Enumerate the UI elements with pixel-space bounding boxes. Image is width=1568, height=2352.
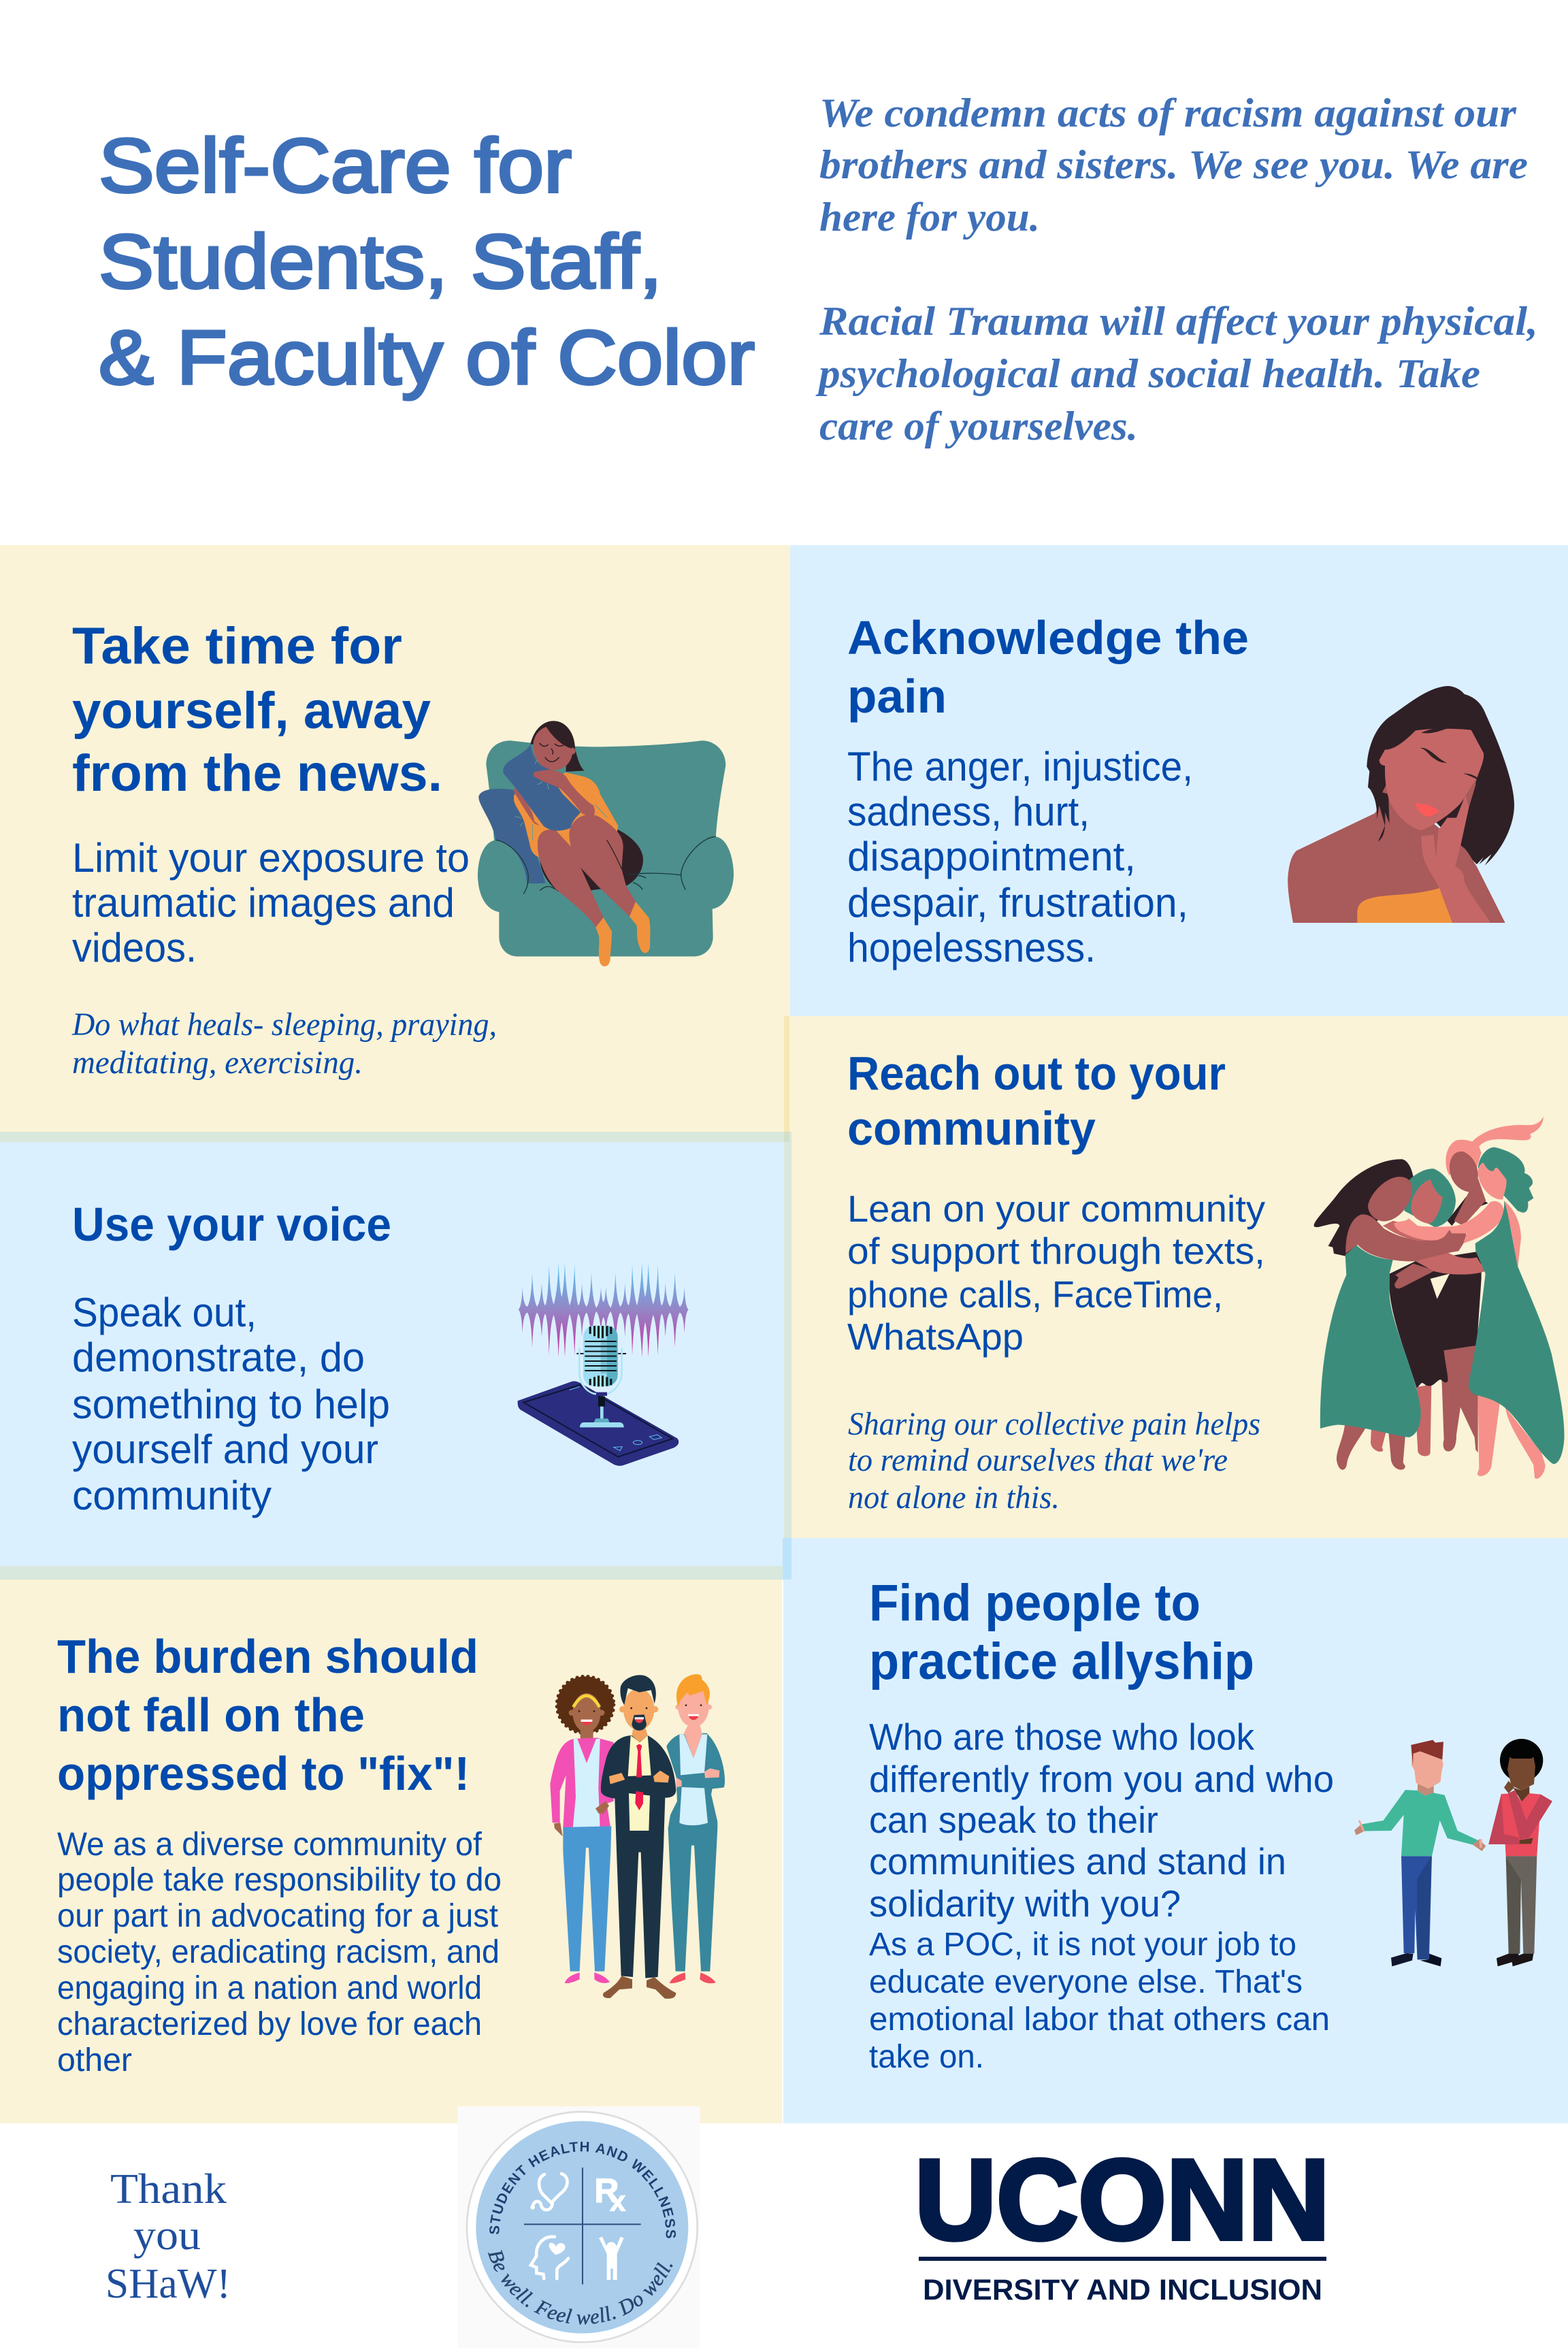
body text: speak out <box>72 1290 390 1518</box>
panel: find people to practice allyship <box>869 1574 1552 2075</box>
intro statement: We condemn acts of racism against our <box>819 91 1517 135</box>
body text: we as a diverse community: our part in advocating for a just <box>57 1898 498 1934</box>
body text: limit exposure <box>72 835 470 970</box>
icon: three diverse colleagues <box>550 1674 725 1999</box>
body text: limit exposure: Limit your exposure to <box>72 835 470 881</box>
body text: the anger: sadness, hurt, <box>847 789 1090 834</box>
heading: acknowledge the pain <box>847 611 1249 723</box>
body text: as a POC: educate everyone else. That's <box>869 1964 1303 2000</box>
heading: find people <box>869 1574 1254 1690</box>
intro statement <box>815 91 1538 448</box>
italic note: sharing our collective pain: to remind ourselves that we're <box>848 1442 1228 1478</box>
intro statement: brothers and sisters. We see you. We are <box>819 142 1528 187</box>
heading: the burden: not fall on the <box>57 1688 365 1742</box>
panel background: take time for yourself <box>0 545 790 1142</box>
title <box>99 123 755 400</box>
body text: as a POC: As a POC, it is not your job to <box>869 1927 1296 1963</box>
body text: we as a diverse community: engaging in a nation and world <box>57 1970 482 2006</box>
heading: take time: Take time for <box>72 617 402 675</box>
heading: reach out <box>847 1047 1226 1155</box>
body text: speak out: Speak out, <box>72 1290 257 1335</box>
body text: the anger: despair, frustration, <box>847 880 1188 926</box>
intro statement: psychological and social health. Take <box>815 351 1480 396</box>
body text: lean on your community: Lean on your community <box>847 1188 1266 1230</box>
intro statement: here for you. <box>819 195 1040 240</box>
body text: as a POC <box>869 1927 1330 2075</box>
body text: speak out: something to help <box>72 1382 390 1427</box>
panel background: the burden should not fall <box>0 1580 783 2123</box>
body text: the anger: The anger, injustice, <box>847 744 1193 789</box>
body text: who are those: can speak to their <box>869 1799 1158 1841</box>
body text: as a POC: take on. <box>869 2039 984 2075</box>
logo: student health and wellness: STUDENT HEALTH AND WELLNESS <box>489 2142 676 2238</box>
body text: limit exposure: traumatic images and <box>72 880 455 926</box>
body text: who are those: solidarity with you? <box>869 1882 1181 1925</box>
heading: reach out: community <box>847 1102 1096 1155</box>
icon: women embracing <box>1314 1116 1565 1479</box>
heading: take time: yourself, away <box>72 682 431 740</box>
body text: speak out: demonstrate, do <box>72 1335 365 1380</box>
heading: reach out: Reach out to your <box>847 1047 1226 1100</box>
icon: woman relaxing on sofa <box>478 721 734 966</box>
panel: use your voice <box>72 1198 689 1518</box>
body text: speak out: yourself and your <box>72 1426 378 1472</box>
icon: woman in pain <box>1288 686 1514 923</box>
logo: student health and wellness: R <box>594 2172 619 2210</box>
body text: the anger <box>847 744 1193 970</box>
thank you note <box>105 2166 231 2307</box>
panel background: use your voice <box>0 1142 784 1566</box>
body text: lean on your community <box>847 1188 1266 1358</box>
intro statement: Racial Trauma will affect your physical, <box>819 299 1538 344</box>
body text: we as a diverse community <box>57 1827 502 2078</box>
italic note: do what heals <box>71 1007 497 1081</box>
heading: find people: Find people to <box>869 1574 1200 1632</box>
heading: the burden: The burden should <box>57 1630 478 1683</box>
body text: we as a diverse community: people take responsibility to do <box>57 1862 502 1898</box>
icon: two allies talking <box>1354 1739 1552 1966</box>
thank you note: SHaW! <box>105 2261 231 2307</box>
body text: lean on your community: WhatsApp <box>847 1316 1024 1358</box>
heading: the burden: oppressed to "fix"! <box>57 1747 470 1800</box>
heading: use your voice: Use your voice <box>72 1198 391 1251</box>
heading: acknowledge the pain: Acknowledge the <box>847 611 1249 664</box>
body text: speak out: community <box>72 1473 272 1518</box>
body text: limit exposure: videos. <box>72 925 197 970</box>
body text: who are those: communities and stand in <box>869 1840 1286 1882</box>
title: Students, Staff, <box>99 219 662 304</box>
italic note: sharing our collective pain: not alone in this. <box>848 1480 1060 1516</box>
body text: lean on your community: phone calls, FaceTime, <box>847 1273 1223 1316</box>
body text: lean on your community: of support through texts, <box>847 1230 1265 1272</box>
body text: the anger: disappointment, <box>847 834 1136 879</box>
logo: uconn diversity and inclusion: DIVERSITY AND INCLUSION <box>923 2274 1322 2306</box>
icon: microphone on phone with sound wave <box>518 1262 689 1466</box>
heading: take time <box>72 617 442 802</box>
italic note: do what heals: meditating, exercising. <box>72 1045 363 1081</box>
body text: we as a diverse community: other <box>57 2042 132 2078</box>
intro statement: care of yourselves. <box>819 404 1138 448</box>
title: Self-Care for <box>99 123 572 208</box>
logo: student health and wellness: Be well. Feel well. Do well. <box>487 2250 672 2325</box>
panel background: find people to practice allyship <box>783 1538 1568 2123</box>
body text: we as a diverse community: society, eradicating racism, and <box>57 1934 500 1970</box>
body text: who are those: differently from you and who <box>869 1758 1334 1800</box>
heading: find people: practice allyship <box>869 1633 1254 1690</box>
thank you note: Thank <box>110 2166 227 2212</box>
italic note: do what heals: Do what heals- sleeping, praying, <box>71 1007 497 1043</box>
panel: acknowledge the pain <box>847 611 1514 970</box>
heading: acknowledge the pain: pain <box>847 670 947 723</box>
thank you note: you <box>133 2212 201 2259</box>
logo: uconn diversity and inclusion: UCONN <box>915 2136 1330 2264</box>
panel background: reach out to your community <box>784 1016 1568 1538</box>
italic note: sharing our collective pain <box>848 1406 1260 1516</box>
body text: we as a diverse community: characterized by love for each <box>57 2006 482 2042</box>
logo: student health and wellness: x <box>610 2185 625 2217</box>
italic note: sharing our collective pain: Sharing our collective pain helps <box>848 1406 1260 1442</box>
panel: take time for yourself <box>71 617 734 1081</box>
body text: the anger: hopelessness. <box>847 925 1096 970</box>
logo: student health and wellness <box>457 2106 700 2343</box>
panel: the burden should not fall on the oppressed <box>57 1630 725 2078</box>
body text: as a POC: emotional labor that others can <box>869 2002 1330 2038</box>
title: & Faculty of Color <box>99 315 755 400</box>
heading: the burden <box>57 1630 478 1800</box>
panel background: acknowledge the pain <box>790 545 1568 1016</box>
body text: we as a diverse community: We as a diverse community of <box>57 1827 483 1863</box>
body text: who are those <box>869 1716 1334 1925</box>
body text: who are those: Who are those who look <box>869 1716 1254 1758</box>
heading: take time: from the news. <box>72 745 442 802</box>
panel: reach out to your community <box>847 1047 1565 1516</box>
